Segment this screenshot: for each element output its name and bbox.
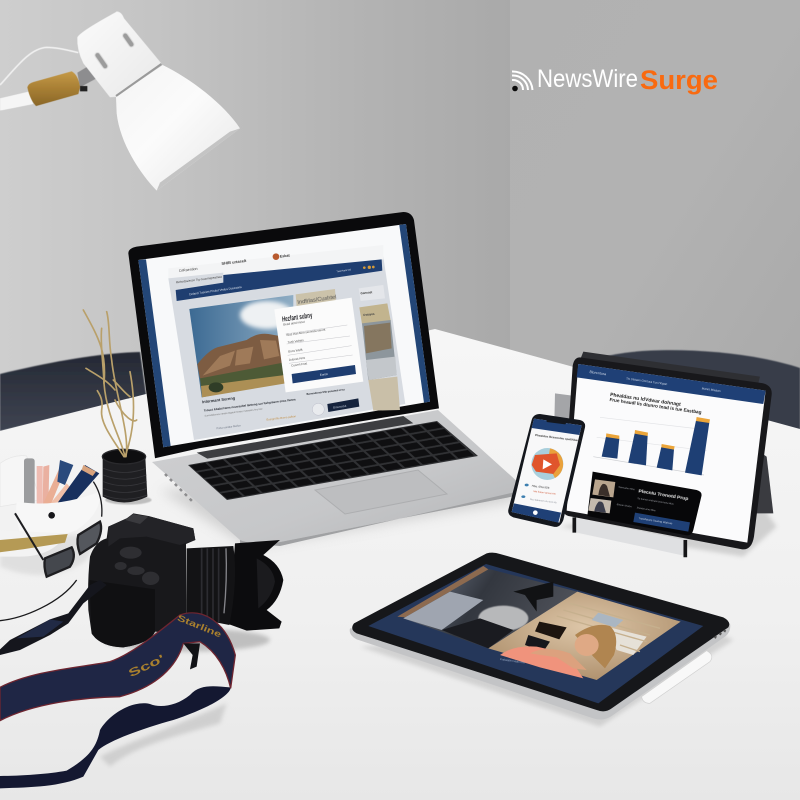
mountain bbox=[197, 334, 287, 378]
bowl left body bbox=[0, 530, 67, 557]
strap shadow bbox=[100, 703, 227, 767]
nav text: Tis Ulstasn Gontura Tus Hogan bbox=[626, 376, 668, 386]
article text: Inlormant Surnng bbox=[202, 395, 236, 404]
desk surface bbox=[0, 329, 800, 800]
panel copy: Sa tuansa vodinala lanta hana Hlus bbox=[637, 497, 675, 506]
donut outer bbox=[531, 448, 563, 480]
list icons bbox=[521, 484, 529, 498]
header text: SHIB urtaselt bbox=[221, 258, 247, 266]
glasses bbox=[15, 482, 102, 577]
form labels: Cuseril Fnat bbox=[291, 361, 308, 368]
flat tablet bbox=[350, 553, 733, 727]
form rows bbox=[286, 325, 353, 363]
panel copy: Stuadat anna Blas bbox=[636, 506, 657, 512]
tree line bbox=[200, 363, 285, 387]
camera strap bbox=[0, 580, 235, 788]
folio stand bbox=[748, 450, 773, 513]
curtain bbox=[403, 592, 483, 630]
header text: Mehodasiesso Tig osuomapeatnea bbox=[176, 275, 222, 284]
phone list text bbox=[521, 484, 558, 504]
picture frame bbox=[535, 622, 567, 639]
presenter photo one bbox=[592, 479, 615, 497]
orange nav icons bbox=[363, 266, 375, 269]
logo word NewsWire: NewsWire bbox=[537, 65, 638, 93]
cloud bbox=[240, 301, 293, 329]
navy pens bbox=[56, 460, 99, 505]
bar four bbox=[685, 421, 709, 475]
camera body bbox=[88, 513, 195, 647]
phone bbox=[508, 414, 585, 527]
logo icon: signal waves bbox=[512, 71, 532, 91]
browser header bbox=[168, 245, 383, 290]
cup shadow bbox=[105, 495, 152, 505]
phone heading: Phealdus Rcasnoleu spellAbasar bbox=[535, 433, 583, 443]
submit label: Eonat bbox=[320, 372, 328, 377]
photo caption: Frabaatlis Inaatu Itos bbox=[500, 657, 526, 665]
lens hood bbox=[228, 540, 283, 631]
cable bbox=[0, 580, 77, 621]
building photo bbox=[362, 320, 397, 380]
form labels: Blus Har Atno seconda seiont bbox=[286, 328, 326, 337]
article text: Sunvidatiornos nanteo lagotuh bnaes mutaanes hns tore bbox=[204, 407, 263, 418]
trackpad bbox=[315, 470, 447, 514]
panel copy bbox=[616, 487, 675, 512]
cup rim bbox=[102, 449, 146, 464]
dried twigs bbox=[83, 310, 137, 457]
chart title: Phealdas nu ldVdwar dohnagt bbox=[610, 392, 681, 408]
background: wall bbox=[0, 0, 800, 470]
room background bbox=[488, 592, 681, 680]
lens ring bbox=[224, 548, 226, 613]
dark surface in photo bbox=[442, 618, 513, 648]
presenter two figure bbox=[594, 501, 606, 513]
strap tail bbox=[183, 643, 200, 669]
form labels bbox=[286, 328, 326, 368]
bowl dot bbox=[48, 512, 55, 519]
phone shell bbox=[508, 414, 585, 527]
joint pin bbox=[80, 86, 87, 91]
lamp wire bbox=[0, 47, 78, 85]
strap lower loop bbox=[0, 686, 231, 788]
hood inner bbox=[257, 558, 275, 608]
donut chart with play button bbox=[531, 448, 563, 480]
stylus bbox=[642, 651, 712, 703]
lamp socket bbox=[77, 12, 161, 97]
download label: Bownodut bbox=[333, 404, 347, 410]
article text: Eusrgel Re Roma palhan bbox=[266, 414, 297, 422]
black pen cup bbox=[102, 449, 152, 505]
bar two bbox=[628, 433, 648, 465]
submit button bbox=[292, 365, 356, 383]
right sidebar bbox=[359, 285, 400, 411]
phone top bar bbox=[532, 419, 582, 435]
header text: DrRaention bbox=[179, 267, 198, 273]
laptop base bbox=[152, 410, 520, 544]
nav text: Blorentura bbox=[589, 370, 607, 376]
list row two: Mnt frutan Vanna Heh bbox=[533, 490, 557, 496]
bar chart bbox=[593, 417, 710, 475]
bar three cap bbox=[661, 444, 675, 450]
bar one cap bbox=[606, 433, 619, 439]
top nav text: Deland Tuseies Pirulut Vedus Dusezans bbox=[189, 285, 243, 296]
panel copy: Etwoar Nealso bbox=[616, 503, 633, 508]
donut orange slice bbox=[547, 448, 563, 478]
panel copy: Siaenaden Hlos bbox=[618, 487, 636, 491]
form labels: Duboat Hins bbox=[289, 356, 306, 362]
gold stripe bbox=[0, 534, 68, 552]
home button bbox=[533, 510, 538, 515]
display bbox=[138, 224, 430, 447]
right tablet with stand bbox=[553, 352, 777, 557]
brand mark bbox=[273, 253, 279, 260]
bowl back bbox=[0, 456, 40, 507]
form labels: Tusk Vebtas bbox=[287, 338, 304, 344]
side ports bbox=[715, 630, 725, 638]
panel card bbox=[587, 472, 702, 535]
tablet display bbox=[567, 364, 766, 543]
presenter photo two bbox=[588, 498, 611, 513]
phone bottom bar bbox=[512, 503, 561, 523]
lens barrel bbox=[187, 546, 235, 625]
blind lines bbox=[557, 603, 660, 652]
phone display bbox=[512, 419, 582, 523]
top nav text bbox=[189, 268, 352, 296]
lens ribs bbox=[202, 548, 219, 622]
panel button label: Trarsdatuns Usanng Waheas bbox=[638, 516, 673, 525]
lamp arm bbox=[0, 92, 33, 111]
lamp bbox=[0, 12, 240, 191]
modal title: Hezfant subny bbox=[281, 310, 314, 324]
chair back left bbox=[0, 352, 146, 431]
tablet shadow bbox=[360, 627, 733, 727]
tablet nav bar bbox=[577, 364, 766, 404]
panel button bbox=[633, 513, 690, 532]
logo word Surge: Surge bbox=[640, 65, 718, 95]
camera bbox=[88, 513, 283, 652]
modal card bbox=[274, 298, 363, 392]
shade seam bbox=[116, 64, 161, 96]
list row three: Reo fatuanon uno tras stu bbox=[530, 498, 558, 504]
pen holder bowl bbox=[0, 456, 100, 575]
laptop screen bbox=[128, 212, 439, 459]
bar two cap bbox=[635, 430, 648, 436]
building facade bbox=[364, 323, 392, 353]
face bbox=[575, 634, 599, 656]
strap upper band bbox=[0, 613, 235, 721]
left arm bbox=[15, 513, 43, 560]
hinge bbox=[197, 416, 413, 459]
shade rim bbox=[157, 128, 240, 191]
stand back panel bbox=[553, 393, 580, 473]
table shadow bbox=[560, 493, 777, 557]
blue side bands bbox=[138, 224, 430, 447]
pink pencils bbox=[37, 463, 73, 507]
camera shadow bbox=[103, 628, 270, 652]
stand legs bbox=[574, 517, 685, 557]
grip bbox=[89, 580, 155, 647]
page panel bbox=[168, 257, 405, 440]
laptop bbox=[128, 212, 520, 546]
brand text: Esbat bbox=[280, 253, 291, 259]
logo: NewsWireSurge bbox=[512, 65, 718, 95]
form labels: Boos Wafft bbox=[288, 348, 303, 354]
login modal bbox=[274, 298, 363, 392]
cup body bbox=[103, 457, 147, 502]
tan block text: Ustayes bbox=[363, 312, 375, 317]
left photo bbox=[403, 568, 577, 648]
download button bbox=[327, 398, 359, 412]
notch bbox=[547, 419, 567, 424]
tan block bbox=[359, 303, 391, 324]
list row one: Hlau. 0foa 8D8 bbox=[532, 484, 550, 490]
keyboard bbox=[188, 421, 478, 500]
strap lettering right: Starline bbox=[176, 613, 223, 639]
stand tray bbox=[574, 517, 685, 556]
dark object bbox=[525, 635, 550, 652]
cup ribs bbox=[103, 468, 147, 499]
folio back cover bbox=[580, 352, 760, 383]
left lens bbox=[44, 547, 74, 577]
right lens bbox=[77, 522, 101, 554]
lamp shade bbox=[116, 65, 240, 191]
base front lip bbox=[240, 486, 520, 546]
modal subtitle: Bead dotd intout bbox=[283, 320, 305, 327]
side ports bbox=[165, 474, 194, 503]
sidebar text: Ganvast bbox=[360, 290, 372, 295]
silver pen bbox=[24, 458, 35, 507]
silver edge bbox=[350, 623, 730, 720]
bowl front bbox=[16, 492, 100, 538]
dials bbox=[115, 547, 159, 585]
brown strip bbox=[397, 566, 488, 617]
article text: Paha ouraltur Reifon bbox=[216, 423, 241, 430]
hair bbox=[575, 625, 616, 668]
right photo: woman bbox=[488, 592, 681, 680]
lamp slots bbox=[94, 32, 135, 70]
pop flash hotshoe bbox=[125, 514, 148, 524]
lamp joint bbox=[77, 67, 97, 87]
tag text: Indfrlas/Cushtel bbox=[297, 295, 337, 306]
article text: Trouct Abalal Hens neuvaultel lanteng sur ltehgrasen snoc llenes bbox=[204, 397, 296, 413]
strap end piece bbox=[0, 580, 107, 655]
bowl shadow bbox=[0, 533, 100, 575]
round icon bbox=[312, 403, 324, 415]
article text bbox=[202, 387, 345, 430]
play triangle bbox=[543, 459, 552, 469]
tablet shell bbox=[563, 357, 772, 549]
navy pad bbox=[17, 619, 63, 638]
top nav text: Tust Hanit Ind bbox=[336, 268, 352, 273]
play tile bbox=[532, 453, 560, 474]
sidebar card bbox=[359, 285, 385, 301]
window blinds bbox=[607, 627, 647, 655]
viewfinder hump bbox=[108, 516, 195, 547]
thumbnail tiles bbox=[368, 377, 400, 411]
screen bezel bbox=[128, 212, 439, 458]
header text bbox=[176, 258, 247, 284]
chart title: Frue hcaudl lis dtunro tnad is tue Eastbag bbox=[609, 397, 702, 415]
chair back right bbox=[600, 350, 800, 432]
presenter one figure bbox=[598, 484, 610, 497]
video panel bbox=[587, 472, 702, 535]
mountain highlights bbox=[203, 340, 279, 376]
article text: Barmadoma Mla pusateal ersu bbox=[306, 387, 345, 396]
street bbox=[366, 357, 397, 380]
lamp shape in photo bbox=[513, 582, 553, 612]
bright sphere in photo bbox=[478, 606, 528, 631]
bar one bbox=[602, 437, 619, 459]
bar three bbox=[657, 447, 674, 470]
right arm bbox=[93, 482, 102, 517]
nav bar bbox=[176, 259, 382, 301]
sky bbox=[189, 295, 293, 397]
panel title: Plecniu Tronotd Prup bbox=[638, 488, 689, 502]
tag label bbox=[296, 289, 336, 307]
window bbox=[592, 613, 623, 627]
grass field bbox=[201, 375, 286, 397]
bar four cap bbox=[696, 417, 710, 423]
hero photo bbox=[189, 295, 293, 397]
nav text bbox=[589, 370, 721, 393]
arm bbox=[530, 649, 587, 670]
black bezel bbox=[352, 553, 729, 711]
pink top bbox=[500, 646, 583, 678]
shadow under laptop bbox=[160, 480, 520, 548]
display bbox=[368, 564, 703, 703]
welcome strip bbox=[168, 273, 223, 290]
bush bbox=[209, 382, 223, 392]
brass collar bbox=[27, 71, 80, 106]
strap lettering left: Sco' bbox=[127, 653, 167, 680]
nav text: Mannt Mlaaan bbox=[702, 386, 721, 393]
chart grid bbox=[593, 417, 708, 475]
